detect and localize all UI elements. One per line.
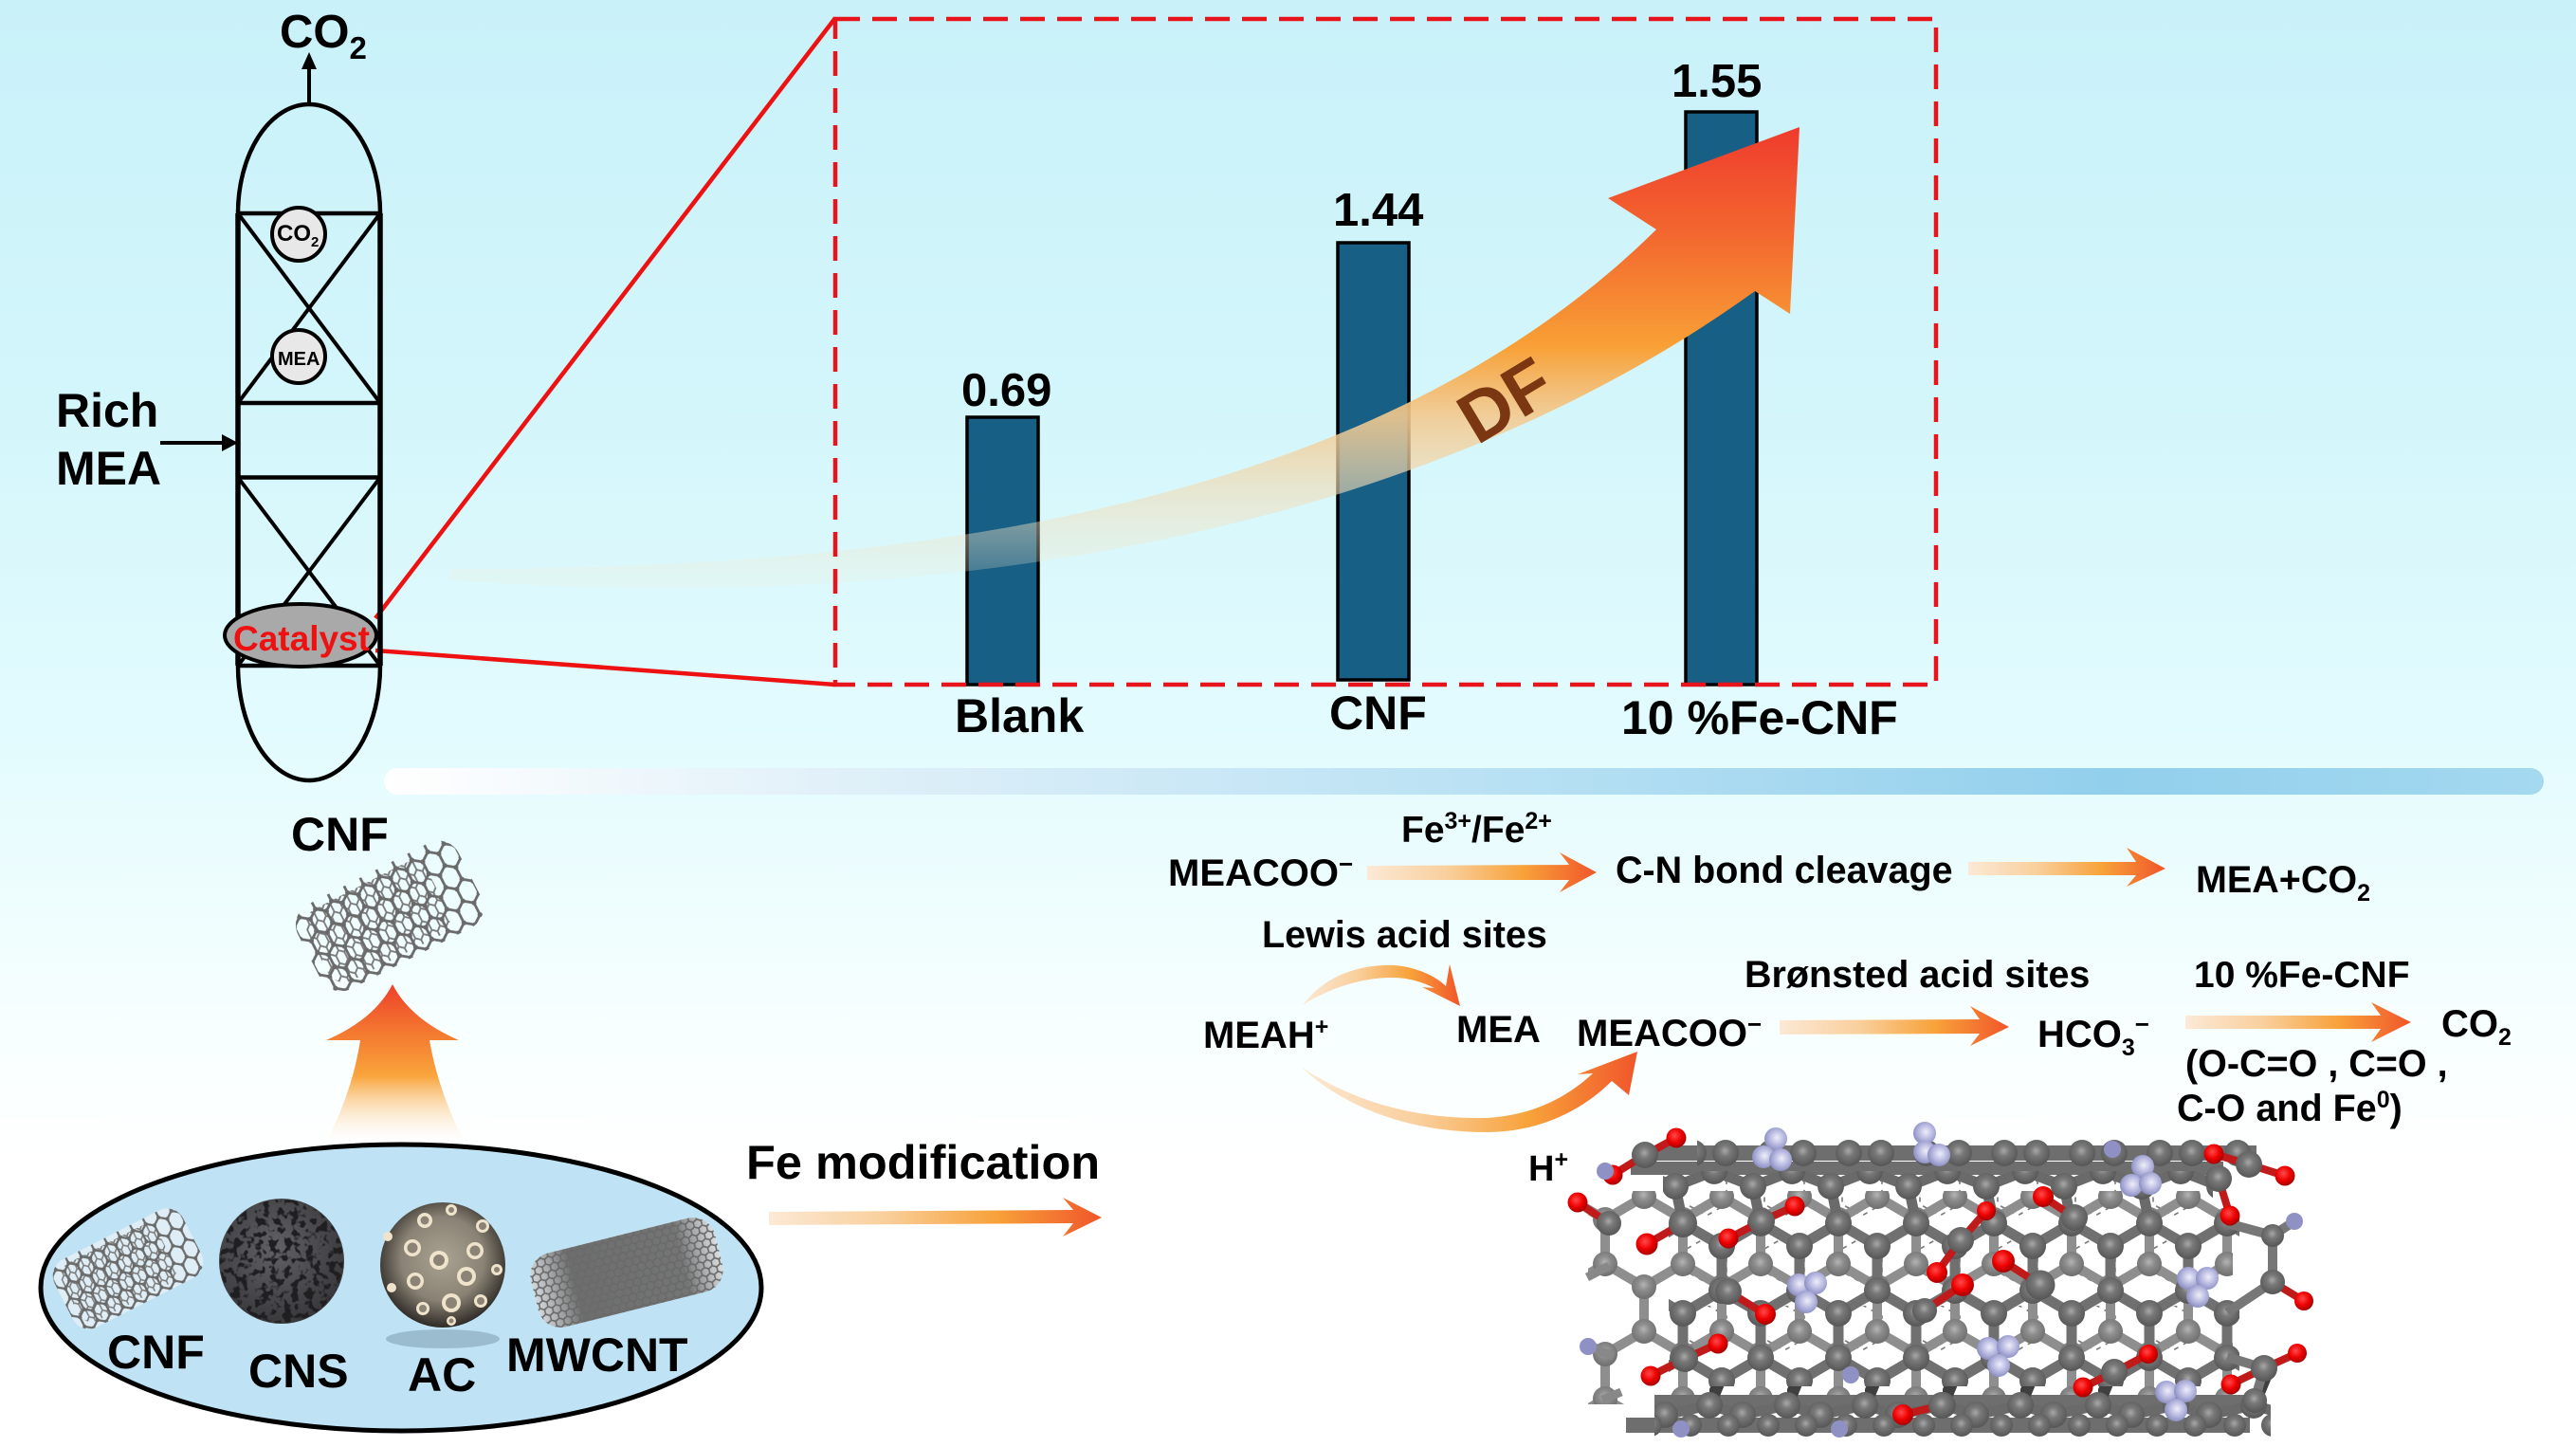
value: 1.44: 1.44 bbox=[1333, 185, 1423, 236]
bar: CNF bbox=[1338, 243, 1409, 680]
left open end bonds bbox=[1578, 1202, 1621, 1400]
text: Bronsted acid sites: Brønsted acid sites bbox=[1745, 954, 2090, 996]
text: functional groups line 1: (O-C=O , C=O , bbox=[2185, 1043, 2448, 1085]
label: Rich MEA: Rich bbox=[56, 384, 158, 437]
arrow bbox=[2185, 1002, 2411, 1042]
catalyst bed: Catalyst bbox=[233, 619, 370, 658]
dashed rear hexagons bbox=[1688, 1172, 2190, 1352]
text: MEACOO-: − bbox=[1339, 850, 1353, 878]
label: DF: DF bbox=[1444, 341, 1566, 459]
text: MEAH+: + bbox=[1315, 1014, 1328, 1040]
text: Fe3+/Fe2+: 2+ bbox=[1525, 808, 1552, 834]
bar chart: DF comparison bbox=[451, 56, 1898, 744]
text: functional groups line 2: C-O and Fe bbox=[2177, 1088, 2377, 1129]
oxygen atoms bbox=[1568, 1128, 2313, 1425]
label: Fe modification: Fe modification bbox=[746, 1135, 1100, 1189]
text: functional groups line 2: ) bbox=[2390, 1088, 2402, 1129]
bottom rear bars bbox=[1626, 1401, 2261, 1425]
arrow: up to CNF bbox=[326, 984, 465, 1143]
top front lattice bbox=[1663, 1157, 2213, 1223]
arrow bbox=[1968, 848, 2165, 887]
curved arrow to MEACOO- bbox=[1301, 1052, 1637, 1132]
single iron atoms bbox=[1580, 1141, 2303, 1438]
label: CNS: CNS bbox=[248, 1345, 349, 1398]
panel: carbon supports bbox=[41, 1145, 761, 1431]
label: CO2: CO bbox=[280, 7, 349, 58]
axis label: Blank: Blank bbox=[955, 689, 1084, 742]
column body bbox=[238, 104, 380, 780]
icon: AC sphere bbox=[380, 1202, 505, 1348]
text: functional groups line 2: 0 bbox=[2377, 1087, 2390, 1113]
reaction pathway bbox=[1168, 808, 2512, 1189]
text: C-N bond cleavage: C-N bond cleavage bbox=[1616, 850, 1953, 891]
feed arrow bbox=[160, 434, 238, 451]
arrow: Fe modification bbox=[769, 1198, 1102, 1236]
axis label: CNF: CNF bbox=[1329, 687, 1427, 740]
value: 1.55: 1.55 bbox=[1672, 56, 1762, 107]
front lattice bbox=[1669, 1210, 2239, 1386]
text: Fe3+/Fe2+: /Fe bbox=[1471, 810, 1525, 851]
icon: CNF tube bbox=[46, 1202, 210, 1335]
label: CNF: CNF bbox=[107, 1326, 205, 1379]
bottom lattice bbox=[1654, 1370, 2271, 1437]
text: MEA+CO2: MEA+CO bbox=[2196, 859, 2357, 901]
catalyst bed bbox=[225, 604, 376, 667]
oval background bbox=[41, 1145, 761, 1431]
label: MWCNT: MWCNT bbox=[506, 1328, 688, 1382]
arrow bbox=[1780, 1006, 2009, 1046]
red zoom connector lines bbox=[375, 18, 835, 685]
right open end bonds bbox=[2227, 1221, 2294, 1401]
carbon atoms of functional groups bbox=[1597, 1142, 2285, 1419]
bubble: CO2 bbox=[272, 208, 325, 261]
text: 10 %Fe-CNF: 10 %Fe-CNF bbox=[2194, 955, 2410, 996]
molecular model: Fe-modified CNF bbox=[1568, 1122, 2313, 1438]
label: Rich MEA: MEA bbox=[56, 442, 161, 495]
CO2 outlet arrow bbox=[301, 52, 317, 104]
top rear atoms bbox=[1697, 1136, 2256, 1170]
text: HCO3-: HCO bbox=[2037, 1014, 2122, 1055]
text: Fe3+/Fe2+: 3+ bbox=[1445, 808, 1471, 834]
top rear bars bbox=[1631, 1153, 2256, 1168]
text: CO2: 2 bbox=[2498, 1024, 2512, 1051]
text: HCO3-: − bbox=[2135, 1010, 2149, 1038]
axis label: 10 %Fe-CNF: 10 %Fe-CNF bbox=[1621, 691, 1898, 744]
iron atoms bbox=[1752, 1122, 2219, 1421]
arrow bbox=[1367, 852, 1597, 892]
functional group bonds bbox=[1578, 1138, 2304, 1415]
divider bar bbox=[384, 768, 2544, 795]
text: MEA+CO2: 2 bbox=[2357, 880, 2370, 907]
bar: 10 %Fe-CNF bbox=[1686, 112, 1757, 685]
bubble: MEA bbox=[272, 330, 325, 383]
red dashed zoom box bbox=[835, 19, 1936, 685]
text: MEACOO- second: − bbox=[1747, 1010, 1762, 1038]
text: MEACOO- second: MEACOO bbox=[1577, 1013, 1747, 1054]
nanotube: selected CNF bbox=[288, 833, 491, 999]
text: H+: + bbox=[1554, 1146, 1568, 1173]
arrow: rising DF trend bbox=[451, 127, 1800, 588]
text: MEACOO-: MEACOO bbox=[1168, 852, 1339, 894]
label: CNF selected: CNF bbox=[291, 808, 389, 861]
bubble: MEA: MEA bbox=[278, 349, 320, 370]
icon: MWCNT tube bbox=[525, 1213, 728, 1332]
text: H+: H bbox=[1528, 1149, 1554, 1189]
value: 0.69: 0.69 bbox=[961, 365, 1051, 416]
bubble: CO2: 2 bbox=[311, 234, 319, 250]
label: AC: AC bbox=[408, 1348, 476, 1401]
icon: CNS sphere bbox=[218, 1198, 345, 1325]
text: HCO3-: 3 bbox=[2122, 1035, 2135, 1061]
text: CO2: CO bbox=[2441, 1003, 2498, 1045]
curved arrow to MEA bbox=[1303, 964, 1460, 1006]
label: CO2: 2 bbox=[349, 30, 367, 65]
bubble: CO2: CO bbox=[277, 221, 311, 247]
column diagram bbox=[56, 7, 380, 780]
text: Lewis acid sites: Lewis acid sites bbox=[1262, 914, 1547, 956]
back lattice bbox=[1588, 1191, 2233, 1404]
bar: Blank bbox=[967, 417, 1038, 685]
text: Fe3+/Fe2+: Fe bbox=[1401, 810, 1445, 851]
text: MEA: MEA bbox=[1456, 1009, 1541, 1051]
text: MEAH+: MEAH bbox=[1203, 1015, 1315, 1056]
